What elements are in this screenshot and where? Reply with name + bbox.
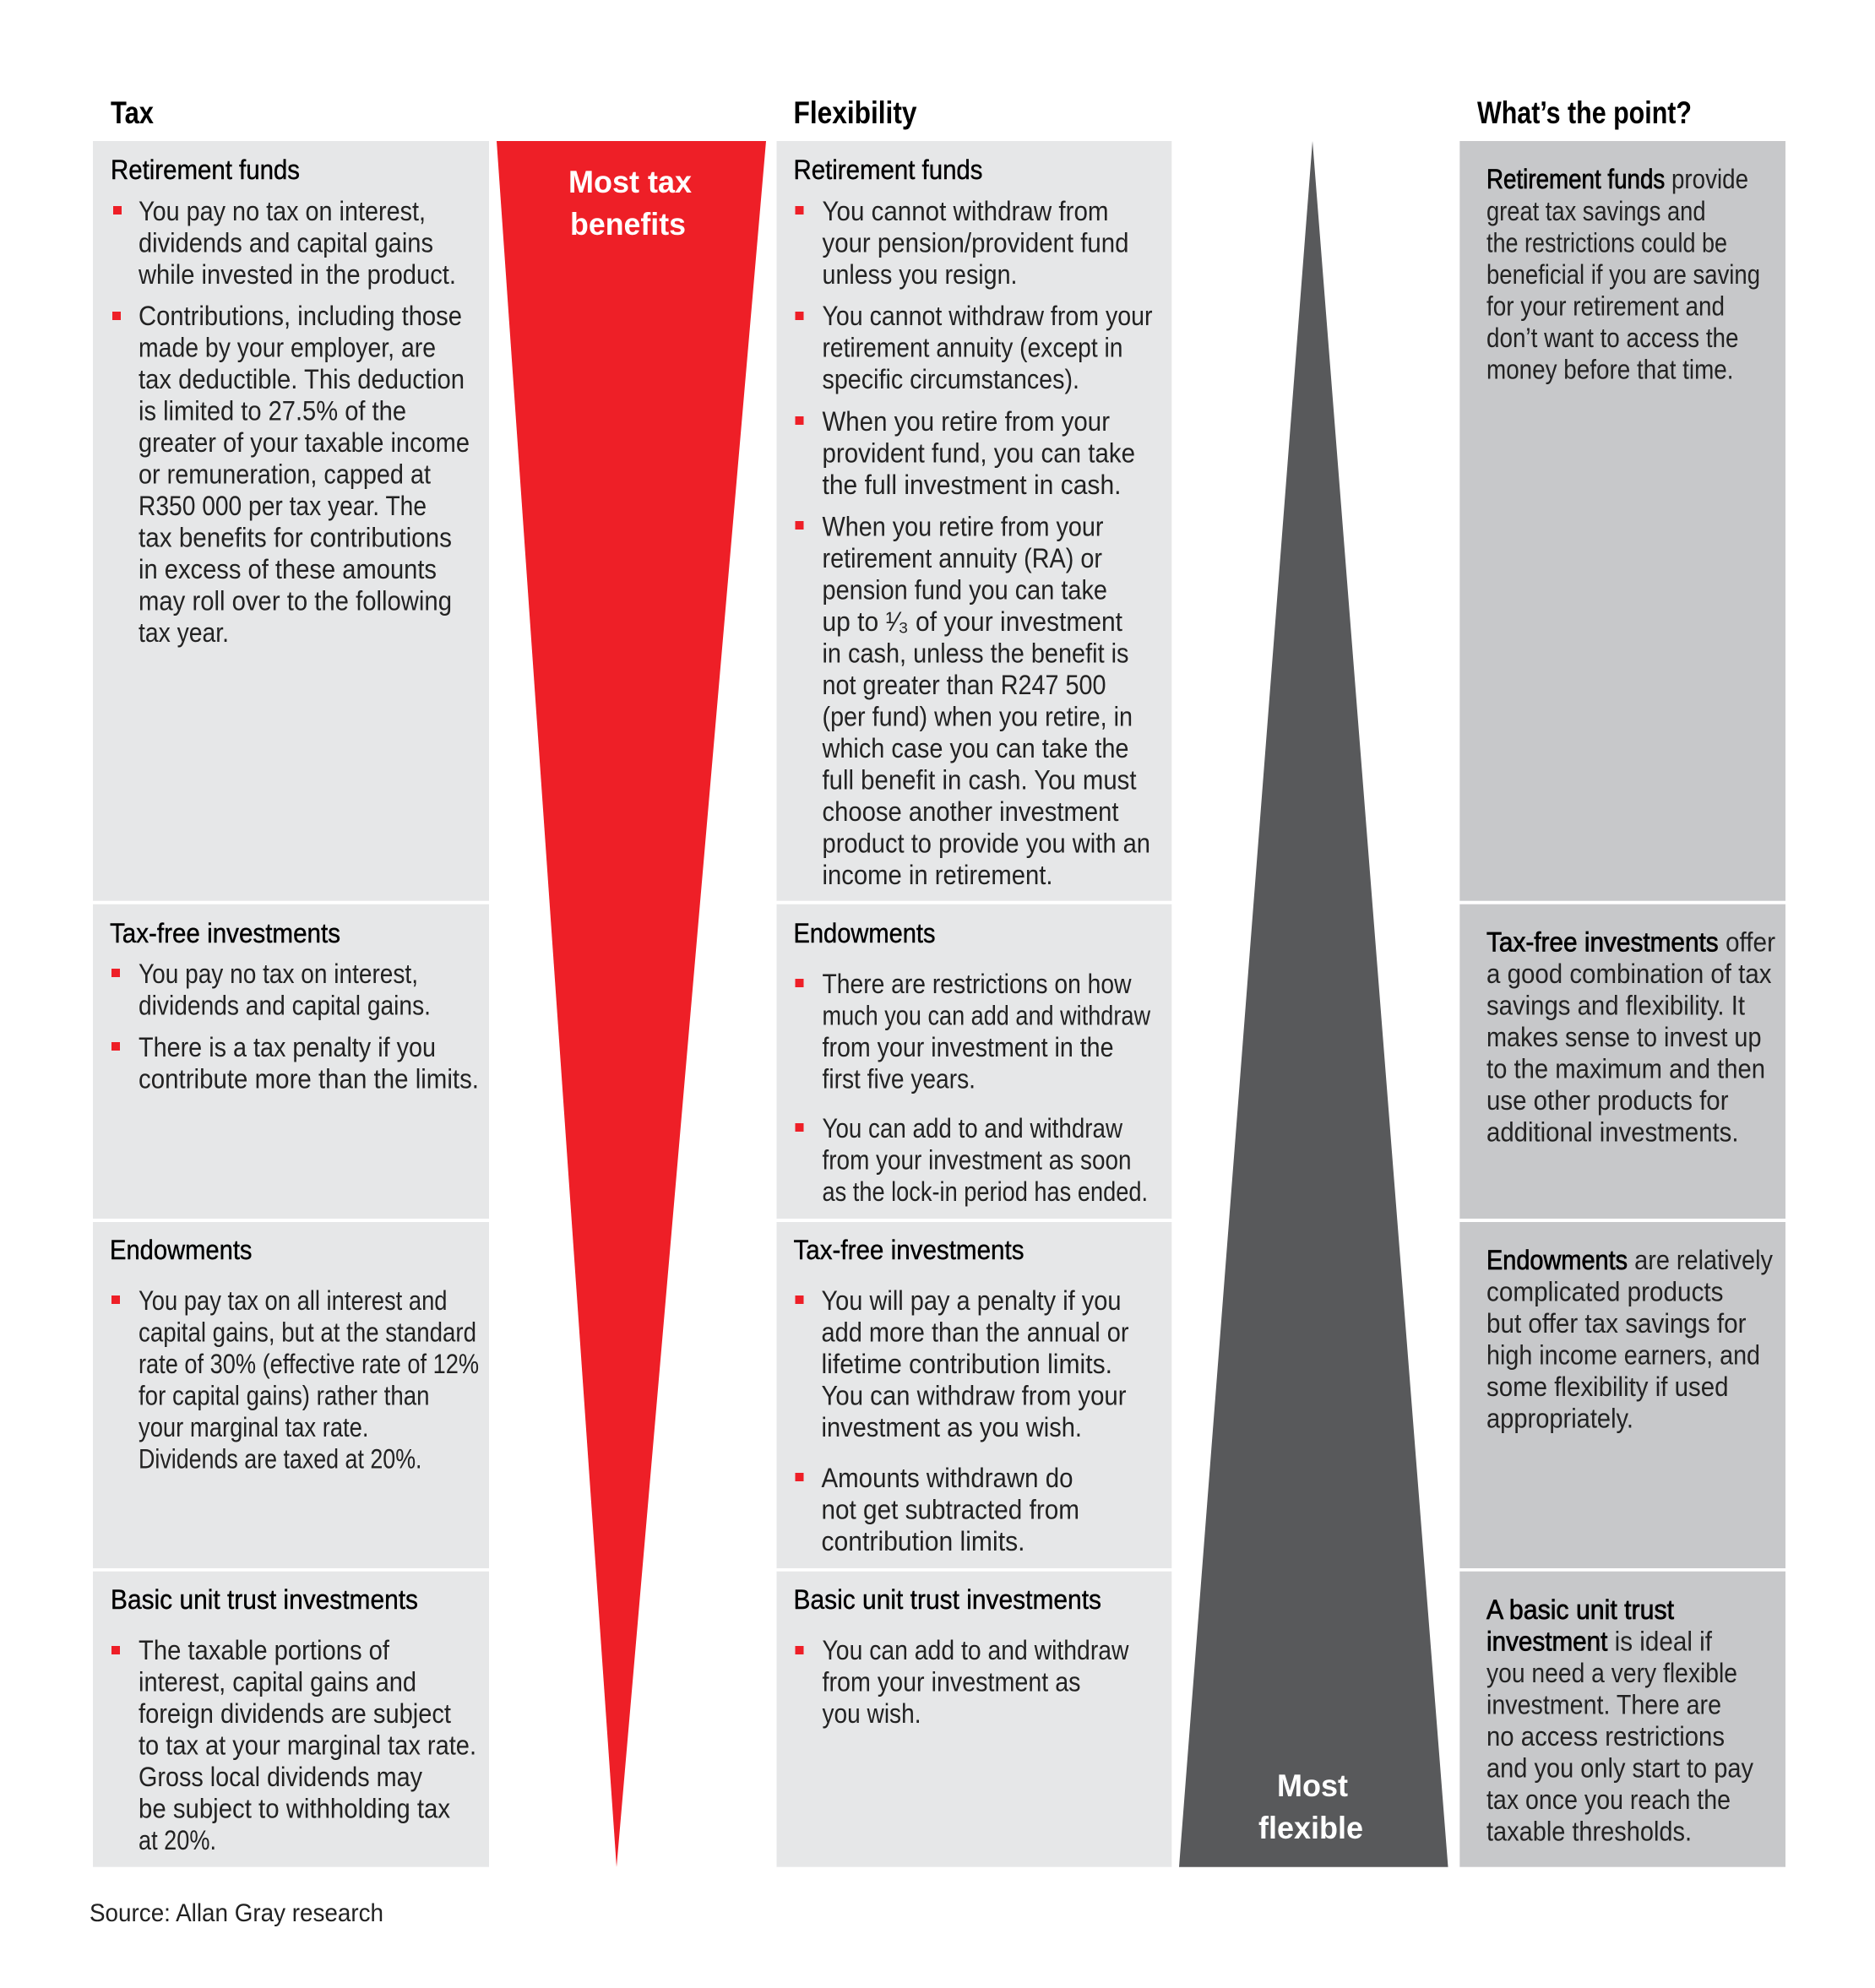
- bullet: no tax: dividends and capital gains.: [139, 990, 431, 1020]
- bullet: RA or pension fund retirement: [796, 512, 1150, 890]
- bullet: contributions are deductible: made by your employer, are: [139, 333, 436, 363]
- bullet: penalty: There is a tax penalty if you: [139, 1032, 436, 1062]
- text block: money before that time.: [1486, 355, 1733, 385]
- bullet: RA or pension fund retirement: income in retirement.: [823, 860, 1052, 890]
- bullet: RA or pension fund retirement: When you retire from your: [823, 512, 1104, 542]
- bullet: contributions are deductible: greater of your taxable income: [139, 427, 470, 458]
- bullet: add and withdraw: you wish.: [823, 1698, 921, 1729]
- heading: Retirement funds: [794, 155, 983, 185]
- text block: to the maximum and then: [1486, 1054, 1765, 1084]
- bullet: provident fund retirement: the full investment in cash.: [823, 470, 1122, 500]
- bullet: taxable portions: be subject to withholding tax: [139, 1794, 450, 1824]
- bullet: penalty: [796, 1285, 1129, 1442]
- bullet: RA or pension fund retirement: (per fund) when you retire, in: [823, 701, 1133, 731]
- panel: tax, tax-free investments: [93, 904, 489, 1219]
- text block: but offer tax savings for: [1486, 1308, 1747, 1339]
- source note: Source: Allan Gray research: [90, 1899, 383, 1927]
- panel: flexibility, basic unit trust investments: [777, 1572, 1171, 1867]
- bullet: cannot withdraw from pension or provident fund: unless you resign.: [823, 259, 1017, 290]
- text block: the restrictions could be: [1486, 228, 1727, 258]
- bullet: contributions are deductible: Contributions, including those: [139, 301, 462, 331]
- bullet: taxable portions: interest, capital gains and: [139, 1667, 416, 1697]
- bullet: contributions are deductible: is limited to 27.5% of the: [139, 395, 406, 426]
- heading: Basic unit trust investments: [111, 1584, 418, 1615]
- bullet: no tax: [111, 959, 431, 1020]
- bullet: no tax while invested: [113, 196, 456, 290]
- heading: Tax-free investments: [794, 1235, 1024, 1265]
- text block: and you only start to pay: [1486, 1753, 1753, 1784]
- bullet: standard rate: Dividends are taxed at 20%.: [139, 1444, 422, 1475]
- bullet: standard rate: You pay tax on all interest and: [139, 1285, 448, 1316]
- column heading: Tax: Tax: [111, 95, 154, 130]
- text block: some flexibility if used: [1486, 1372, 1728, 1402]
- text block: additional investments.: [1486, 1116, 1738, 1147]
- bullet: RA or pension fund retirement: not greater than R247 500: [823, 670, 1106, 700]
- panel: flexibility, retirement funds: [777, 141, 1171, 901]
- panel: point of basic unit trust investment: [1459, 1572, 1785, 1867]
- bullet: cannot withdraw from pension or provident fund: [796, 196, 1128, 290]
- panel: tax, retirement funds: [93, 141, 489, 901]
- bullet: standard rate: [111, 1285, 479, 1475]
- text block: don’t want to access the: [1486, 323, 1738, 353]
- text block: appropriately.: [1486, 1404, 1633, 1434]
- bullet: provident fund retirement: provident fund, you can take: [823, 437, 1135, 468]
- text block: high income earners, and: [1486, 1339, 1760, 1370]
- text block: makes sense to invest up: [1486, 1022, 1762, 1052]
- bullet: cannot withdraw from pension or provident fund: You cannot withdraw from: [823, 196, 1108, 226]
- panel: point of endowments: [1459, 1222, 1785, 1568]
- bullet: add and withdraw: from your investment as: [823, 1667, 1081, 1697]
- arrow: grey wedge, most flexible: [1179, 141, 1448, 1867]
- bullet: cannot withdraw from retirement annuity: You cannot withdraw from your: [823, 301, 1153, 331]
- wedge label: Most tax: [568, 165, 692, 199]
- bullet: RA or pension fund retirement: in cash, unless the benefit is: [823, 638, 1128, 669]
- text block: beneficial if you are saving: [1486, 259, 1760, 290]
- bullet: taxable portions: The taxable portions of: [139, 1635, 389, 1665]
- wedge label: Most: [1277, 1768, 1348, 1803]
- bullet: penalty: [111, 1032, 479, 1094]
- bullet: no tax: You pay no tax on interest,: [139, 959, 418, 989]
- heading: Endowments: [794, 918, 936, 948]
- bullet: contributions are deductible: tax benefits for contributions: [139, 522, 452, 552]
- text block: investment is ideal if: [1486, 1627, 1712, 1657]
- bullet: RA or pension fund retirement: retirement annuity (RA) or: [823, 543, 1102, 573]
- panel: tax, endowments: [93, 1222, 489, 1568]
- bullet: contributions are deductible: R350 000 per tax year. The: [139, 491, 427, 521]
- bullet: contributions are deductible: or remuneration, capped at: [139, 459, 431, 490]
- text block: a good combination of tax: [1486, 959, 1772, 989]
- bullet: contributions are deductible: tax deductible. This deduction: [139, 364, 465, 394]
- text block: tax once you reach the: [1486, 1784, 1731, 1815]
- bullet: withdrawals: not get subtracted from: [821, 1495, 1079, 1525]
- text block: [1486, 927, 1775, 1147]
- bullet: penalty: add more than the annual or: [821, 1317, 1129, 1348]
- bullet: RA or pension fund retirement: product to provide you with an: [823, 828, 1150, 858]
- text block: A basic unit trust: [1486, 1594, 1674, 1625]
- arrow: red wedge, most tax benefits: [497, 141, 766, 1867]
- bullet: cannot withdraw from retirement annuity: specific circumstances).: [823, 364, 1079, 394]
- text block: [1486, 1245, 1773, 1434]
- panel: point of retirement funds: [1459, 141, 1785, 901]
- wedge label: [1258, 1768, 1363, 1845]
- bullet: taxable portions: [111, 1635, 476, 1855]
- bullet: provident fund retirement: When you retire from your: [823, 406, 1110, 437]
- panel: tax, basic unit trust investments: [93, 1572, 489, 1867]
- text block: use other products for: [1486, 1085, 1729, 1116]
- heading: Endowments: [110, 1235, 252, 1265]
- text block: you need a very flexible: [1486, 1658, 1737, 1688]
- column heading: Flexibility: Flexibility: [794, 95, 917, 130]
- bullet: cannot withdraw from retirement annuity: [796, 301, 1153, 394]
- bullet: taxable portions: foreign dividends are subject: [139, 1698, 451, 1729]
- bullet: RA or pension fund retirement: choose another investment: [823, 796, 1119, 827]
- bullet: no tax while invested: dividends and capital gains: [139, 228, 433, 258]
- bullet: cannot withdraw from retirement annuity: retirement annuity (except in: [823, 333, 1123, 363]
- bullet: penalty: You will pay a penalty if you: [821, 1285, 1122, 1316]
- bullet: RA or pension fund retirement: pension fund you can take: [823, 574, 1107, 605]
- bullet: provident fund retirement: [796, 406, 1135, 500]
- bullet: taxable portions: to tax at your marginal tax rate.: [139, 1730, 476, 1760]
- bullet: penalty: lifetime contribution limits.: [821, 1349, 1112, 1379]
- text block: complicated products: [1486, 1277, 1723, 1307]
- bullet: contributions are deductible: tax year.: [139, 617, 229, 648]
- heading: Retirement funds: [111, 155, 300, 185]
- bullet: withdrawals: contribution limits.: [821, 1526, 1025, 1556]
- column heading: What's the point?: What’s the point?: [1477, 95, 1692, 130]
- wedge label: benefits: [570, 207, 686, 242]
- panel: flexibility, tax-free investments: [777, 1222, 1171, 1568]
- bullet: withdrawals: [796, 1463, 1079, 1556]
- bullet: contributions are deductible: in excess of these amounts: [139, 554, 437, 584]
- bullet: after lock-in: as the lock-in period has ended.: [823, 1176, 1148, 1207]
- bullet: standard rate: rate of 30% (effective rate of 12%: [139, 1349, 479, 1379]
- text block: Endowments are relatively: [1486, 1245, 1773, 1275]
- bullet: RA or pension fund retirement: full benefit in cash. You must: [823, 765, 1137, 796]
- bullet: standard rate: your marginal tax rate.: [139, 1412, 368, 1442]
- bullet: restrictions: There are restrictions on how: [823, 969, 1132, 999]
- heading: Basic unit trust investments: [794, 1584, 1101, 1615]
- bullet: standard rate: for capital gains) rather than: [139, 1380, 429, 1410]
- bullet: penalty: contribute more than the limits.: [139, 1064, 479, 1094]
- bullet: after lock-in: from your investment as soon: [823, 1145, 1132, 1176]
- bullet: penalty: You can withdraw from your: [821, 1380, 1127, 1410]
- bullet: restrictions: first five years.: [823, 1064, 976, 1094]
- bullet: taxable portions: at 20%.: [139, 1825, 216, 1855]
- text block: Tax-free investments offer: [1486, 927, 1775, 958]
- bullet: restrictions: [796, 969, 1151, 1094]
- text block: [1486, 1594, 1753, 1846]
- bullet: contributions are deductible: may roll over to the following: [139, 586, 452, 616]
- bullet: taxable portions: Gross local dividends may: [139, 1762, 422, 1792]
- wedge label: [568, 165, 692, 242]
- heading: Tax-free investments: [110, 918, 340, 948]
- bullet: cannot withdraw from pension or provident fund: your pension/provident fund: [823, 228, 1128, 258]
- wedge label: flexible: [1258, 1811, 1363, 1845]
- bullet: no tax while invested: while invested in the product.: [138, 259, 456, 290]
- bullet: after lock-in: You can add to and withdraw: [823, 1113, 1123, 1143]
- text block: [1486, 164, 1760, 385]
- bullet: add and withdraw: You can add to and withdraw: [823, 1635, 1129, 1665]
- text block: savings and flexibility. It: [1486, 990, 1745, 1020]
- text block: for your retirement and: [1486, 291, 1725, 321]
- bullet: add and withdraw: [796, 1635, 1129, 1729]
- text block: no access restrictions: [1486, 1721, 1725, 1752]
- text block: taxable thresholds.: [1486, 1816, 1692, 1846]
- bullet: standard rate: capital gains, but at the standard: [139, 1317, 476, 1348]
- bullet: restrictions: from your investment in the: [823, 1032, 1113, 1062]
- panel: flexibility, endowments: [777, 904, 1171, 1219]
- bullet: RA or pension fund retirement: up to ¹⁄₃ of your investment: [823, 606, 1122, 637]
- bullet: no tax while invested: You pay no tax on interest,: [139, 196, 426, 226]
- bullet: contributions are deductible: [112, 301, 470, 648]
- text block: investment. There are: [1486, 1689, 1721, 1719]
- bullet: withdrawals: Amounts withdrawn do: [821, 1463, 1073, 1493]
- text block: great tax savings and: [1486, 196, 1706, 226]
- bullet: after lock-in: [796, 1113, 1148, 1207]
- bullet: RA or pension fund retirement: which case you can take the: [822, 733, 1128, 763]
- bullet: penalty: investment as you wish.: [821, 1412, 1082, 1442]
- bullet: restrictions: much you can add and withdraw: [823, 1000, 1151, 1030]
- text block: Retirement funds provide: [1486, 164, 1748, 194]
- panel: point of tax-free investments: [1459, 904, 1785, 1219]
